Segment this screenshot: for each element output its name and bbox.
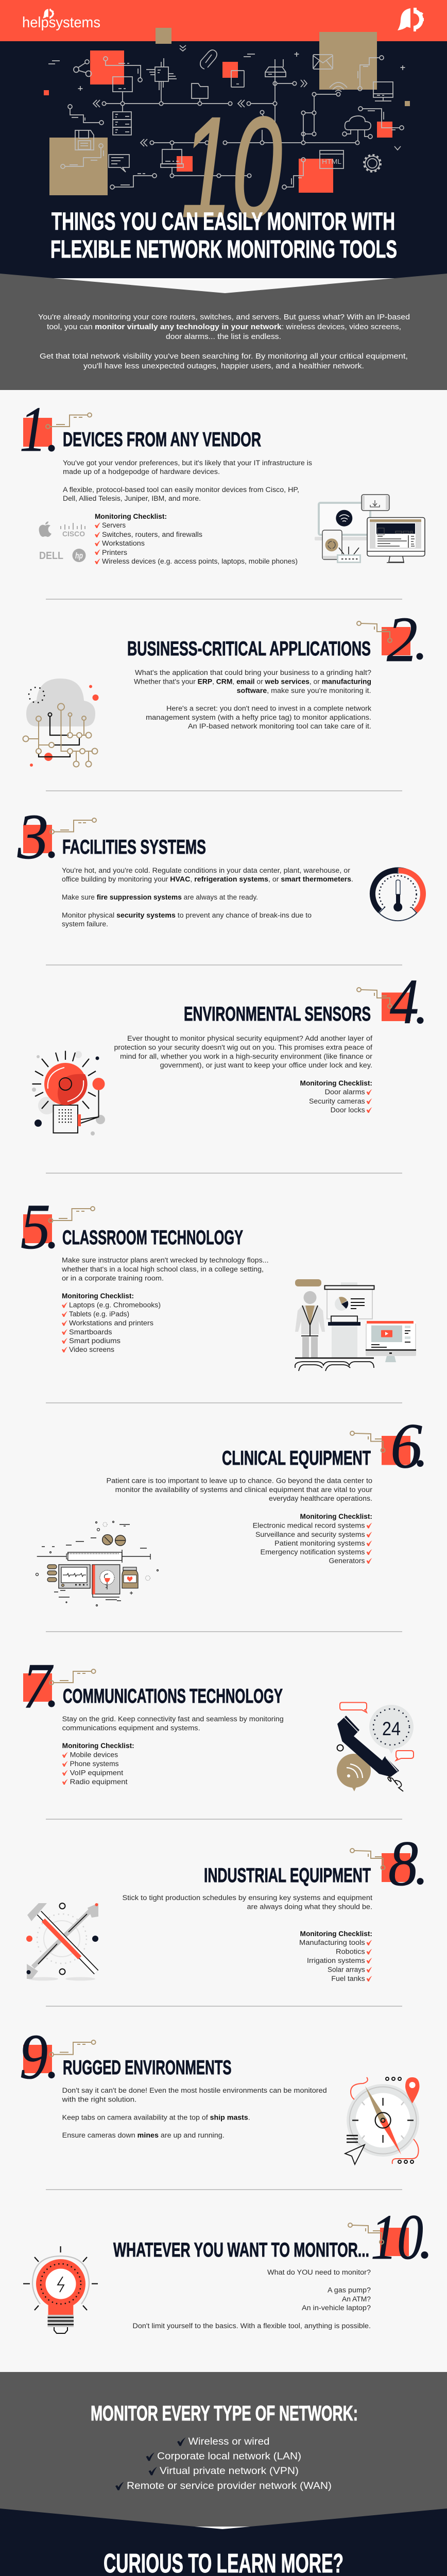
- icon: crossed hammer and wrench: [26, 1903, 98, 1980]
- icon: alarm bell: [32, 1051, 105, 1136]
- intro panel: [0, 274, 447, 390]
- body text: A flexible, protocol-based tool can easily monitor devices from Cisco, HP,: [63, 486, 299, 494]
- body text: Don't say it can't be done! Even the most hostile environments can be monitored: [62, 2087, 327, 2094]
- body text: office building by monitoring your HVAC, refrigeration systems , or smart thermometers .: [62, 875, 353, 883]
- body text: [62, 867, 353, 928]
- number badge 9: [20, 2022, 96, 2093]
- body text: are always doing what they should be.: [247, 1903, 372, 1911]
- icon: compass: [345, 2077, 419, 2164]
- body text: [134, 669, 371, 730]
- monitoring checklist: Mobile devices: [70, 1751, 118, 1759]
- divider: [46, 790, 402, 791]
- monitoring checklist: Smart podiums: [69, 1337, 121, 1345]
- html window: HTML: [322, 158, 341, 165]
- icon: cloud circuit: [23, 679, 99, 767]
- intro text: door alarms... the list is endless.: [166, 333, 281, 341]
- number badge 10: 10: [371, 2202, 423, 2273]
- section 5: classroom technology: [21, 1192, 416, 1371]
- body text: Ever thought to monitor physical security equipment? Add another layer of: [127, 1035, 372, 1042]
- icon: logo mark: [398, 8, 424, 31]
- section 8: industrial equipment: [26, 1828, 423, 1982]
- section 6: clinical equipment: [36, 1411, 423, 1606]
- body text: monitor the availability of systems and clinical equipment that are vital to your: [115, 1486, 373, 1494]
- html window: [320, 150, 343, 168]
- icon: connected devices: [315, 495, 425, 563]
- floppy: [75, 130, 94, 150]
- number badge 3: 3: [17, 802, 48, 873]
- monitoring checklist: Phone systems: [70, 1760, 119, 1768]
- monitoring checklist: Solar arrays: [328, 1966, 365, 1973]
- monitoring checklist: [299, 1930, 372, 1982]
- chat: [109, 155, 129, 172]
- body text: [62, 2087, 327, 2139]
- number badge 1: [20, 394, 92, 465]
- vendor logos: hp: [75, 551, 83, 561]
- number badge 5: [21, 1192, 95, 1263]
- number badge 4: [357, 967, 423, 1038]
- heading: FACILITIES SYSTEMS: [62, 836, 206, 858]
- monitoring checklist: Servers: [102, 521, 126, 529]
- icon: medical equipment: [36, 1521, 159, 1606]
- icon: presenter in classroom: [295, 1279, 416, 1371]
- heading: COMMUNICATIONS TECHNOLOGY: [63, 1685, 283, 1707]
- body text: made up of a hodgepodge of hardware devices.: [63, 468, 220, 476]
- body text: Stick to tight production schedules by ensuring key systems and equipment: [123, 1894, 372, 1902]
- chip: [146, 58, 177, 101]
- vendor logos: [39, 521, 85, 562]
- body text: whether that's in a local high school class, in a college setting,: [61, 1265, 264, 1273]
- network list: Remote or service provider network (WAN): [127, 2481, 332, 2492]
- heading: INDUSTRIAL EQUIPMENT: [204, 1865, 371, 1887]
- number badge 7: 7: [23, 1651, 54, 1722]
- body text: Keep tabs on camera availability at the top of ship masts .: [62, 2113, 250, 2122]
- divider: [46, 1402, 402, 1403]
- folder and phone: [192, 71, 244, 101]
- intro text: Get that total network visibility you've been searching for. By monitoring all your critical equipment,: [40, 352, 408, 361]
- network list: Corporate local network (LAN): [157, 2451, 301, 2462]
- icon: light bulb: [23, 2246, 98, 2333]
- monitoring checklist: Surveillance and security systems: [255, 1531, 365, 1538]
- number badge 6: [350, 1411, 423, 1482]
- body text: Here's a secret: you don't need to invest in a complete network: [166, 705, 371, 712]
- body text: An ATM?: [342, 2295, 371, 2303]
- monitoring checklist: VoIP equipment: [70, 1769, 123, 1776]
- section 1: devices from any vendor: [20, 394, 425, 565]
- body text: or in a corporate training room.: [62, 1274, 164, 1282]
- body text: A gas pump?: [328, 2286, 371, 2294]
- header banner: [0, 0, 447, 278]
- body text: [62, 1715, 284, 1732]
- monitoring checklist: Laptops (e.g. Chromebooks): [69, 1301, 161, 1309]
- number badge 1: 1: [20, 394, 46, 465]
- body text: Patient care is too important to leave up to chance. Go beyond the data center to: [106, 1477, 372, 1485]
- section 7: communications technology: [23, 1651, 414, 1791]
- heading: CLASSROOM TECHNOLOGY: [62, 1227, 243, 1249]
- monitoring checklist: Monitoring Checklist:: [62, 1742, 134, 1750]
- hero colour blocks: [44, 28, 410, 195]
- gear: [364, 155, 381, 172]
- body text: protection so your security doesn't wig out on you. This promises extra peace of: [114, 1044, 372, 1051]
- body text: [61, 1257, 269, 1282]
- monitoring checklist: Workstations: [102, 539, 145, 547]
- big numeral 10: 10: [181, 87, 283, 247]
- number badge 9: 9: [20, 2022, 48, 2093]
- monitoring checklist: Video screens: [69, 1346, 114, 1353]
- number badge 5: 5: [21, 1192, 50, 1263]
- body text: [106, 1477, 373, 1502]
- heading: CLINICAL EQUIPMENT: [222, 1447, 371, 1469]
- body text: everyday healthcare operations.: [269, 1495, 372, 1502]
- body text: Make sure instructor plans aren't wrecked by technology flops...: [62, 1257, 269, 1264]
- monitoring checklist: Patient monitoring systems: [274, 1539, 365, 1547]
- title: [50, 208, 397, 263]
- body text: Stay on the grid. Keep connectivity fast and seamless by monitoring: [62, 1715, 284, 1723]
- network list: [115, 2436, 332, 2492]
- number badge 2: 2: [387, 604, 418, 675]
- monitoring checklist: Monitoring Checklist:: [300, 1079, 372, 1087]
- monitoring checklist: [95, 513, 298, 565]
- section 9: rugged environments: [20, 2022, 419, 2164]
- monitoring checklist: Monitoring Checklist:: [300, 1930, 372, 1938]
- body text: [114, 1035, 373, 1069]
- number badge 6: 6: [390, 1411, 422, 1482]
- body text: [63, 459, 312, 502]
- network list: Wireless or wired: [188, 2436, 270, 2447]
- number badge 7: [23, 1651, 96, 1722]
- body text: management system (with a hefty price tag) to monitor applications.: [146, 714, 371, 721]
- section 3: facilities systems: [17, 802, 424, 928]
- number badge 2: [357, 604, 423, 675]
- number badge 8: 8: [388, 1828, 418, 1900]
- network list: Virtual private network (VPN): [160, 2466, 299, 2477]
- router: [265, 59, 286, 77]
- number badge 3: [17, 802, 96, 873]
- monitoring checklist: Electronic medical record systems: [253, 1522, 365, 1529]
- monitoring checklist: Radio equipment: [70, 1778, 128, 1786]
- body text: What's the application that could bring your business to a grinding halt?: [135, 669, 371, 676]
- monitoring checklist: Switches, routers, and firewalls: [102, 531, 202, 538]
- body text: What do YOU need to monitor?: [267, 2268, 371, 2276]
- monitoring checklist: Emergency notification systems: [261, 1548, 365, 1556]
- body text: Don't limit yourself to the basics. With a flexible tool, anything is possible.: [133, 2322, 371, 2330]
- monitoring checklist: Door alarms: [325, 1088, 365, 1096]
- intro text: You're already monitoring your core routers, switches, and servers. But guess what? With an IP-based: [38, 313, 410, 321]
- number badge 4: 4: [390, 967, 419, 1038]
- monitoring checklist: Smartboards: [69, 1328, 112, 1336]
- icon: telephone: 24: [382, 1718, 401, 1739]
- divider: [46, 1173, 402, 1174]
- paperclip: [200, 50, 217, 69]
- body text: mind for all, whether you work in a high-security environment (like finance or: [120, 1053, 373, 1060]
- monitoring checklist: Irrigation systems: [307, 1957, 365, 1964]
- monitoring checklist: Monitoring Checklist:: [62, 1292, 134, 1300]
- number badge 10: [348, 2202, 428, 2273]
- monitoring checklist: Monitoring Checklist:: [95, 513, 167, 520]
- body text: An in-vehicle laptop?: [302, 2304, 371, 2312]
- icon: telephone: [337, 1702, 414, 1791]
- vendor logos: CISCO: [62, 530, 85, 538]
- intro text: [38, 313, 410, 370]
- monitoring checklist: [300, 1079, 372, 1114]
- body text: Dell, Allied Telesis, Juniper, IBM, and more.: [63, 495, 201, 502]
- monitoring checklist: Printers: [102, 549, 127, 556]
- section 10: whatever you want to monitor: [23, 2202, 428, 2333]
- body text: You're hot, and you're cold. Regulate conditions in your data center, plant, warehouse, or: [62, 867, 351, 874]
- monitoring checklist: Generators: [329, 1557, 365, 1565]
- envelope: [313, 55, 333, 69]
- monitoring checklist: [62, 1292, 161, 1353]
- call to action panel: [0, 2509, 447, 2576]
- divider: [46, 1819, 402, 1820]
- body text: Make sure fire suppression systems are always at the ready.: [62, 893, 258, 901]
- body text: Monitor physical security systems to prevent any chance of break-ins due to: [62, 911, 312, 919]
- share: [74, 60, 92, 76]
- body text: Whether that's your ERP, CRM, email or web services, or manufacturing: [134, 678, 371, 685]
- section 4: environmental sensors: [32, 967, 423, 1136]
- monitoring checklist: Fuel tanks: [331, 1975, 365, 1982]
- monitoring checklist: Tablets (e.g. iPads): [69, 1310, 129, 1318]
- monitoring checklist: Wireless devices (e.g. access points, laptops, mobile phones): [102, 557, 298, 565]
- monitoring checklist: Door locks: [331, 1106, 365, 1114]
- vendor logos: DELL: [39, 550, 63, 562]
- laptop: [161, 149, 183, 167]
- monitoring checklist: Monitoring Checklist:: [300, 1513, 372, 1520]
- server and monitor: [113, 77, 132, 135]
- divider: [46, 599, 402, 600]
- heading: RUGGED ENVIRONMENTS: [63, 2057, 232, 2079]
- body text: system failure.: [62, 920, 108, 928]
- body text: [123, 1894, 372, 1911]
- body text: Ensure cameras down mines are up and running.: [62, 2131, 225, 2139]
- monitoring checklist: Workstations and printers: [69, 1319, 153, 1327]
- network types panel: [0, 2372, 447, 2527]
- body text: communications equipment and systems.: [62, 1724, 200, 1732]
- logo: helpsystems: helpsystems: [22, 14, 100, 31]
- body text: software, make sure you're monitoring it.: [237, 687, 371, 694]
- monitoring checklist: [62, 1742, 134, 1786]
- intro text: you'll have less unexpected outages, happier users, and a healthier network.: [83, 362, 364, 370]
- divider: [46, 1631, 402, 1632]
- monitoring checklist: Manufacturing tools: [299, 1939, 365, 1946]
- icon: thermometer gauge: [371, 868, 424, 922]
- intro text: tool, you can monitor virtually any technology in your network : wireless devices, video screens,: [47, 323, 401, 331]
- monitoring checklist: [253, 1513, 372, 1565]
- body text: An IP-based network monitoring tool can take care of it.: [188, 722, 371, 730]
- body text: [133, 2268, 371, 2330]
- number badge 8: [350, 1828, 423, 1900]
- body text: government), or just want to keep your office under lock and key.: [160, 1061, 372, 1069]
- divider: [46, 2006, 402, 2007]
- network line art: [48, 45, 405, 189]
- divider: [46, 964, 402, 965]
- monitoring checklist: Robotics: [336, 1948, 365, 1956]
- section 2: business-critical applications: [23, 604, 423, 767]
- body text: with the right solution.: [62, 2096, 136, 2104]
- body text: You've got your vendor preferences, but it's likely that your IT infrastructure is: [63, 459, 312, 467]
- divider: [46, 2189, 402, 2190]
- monitoring checklist: Security cameras: [309, 1097, 365, 1105]
- heading: DEVICES FROM ANY VENDOR: [63, 429, 261, 451]
